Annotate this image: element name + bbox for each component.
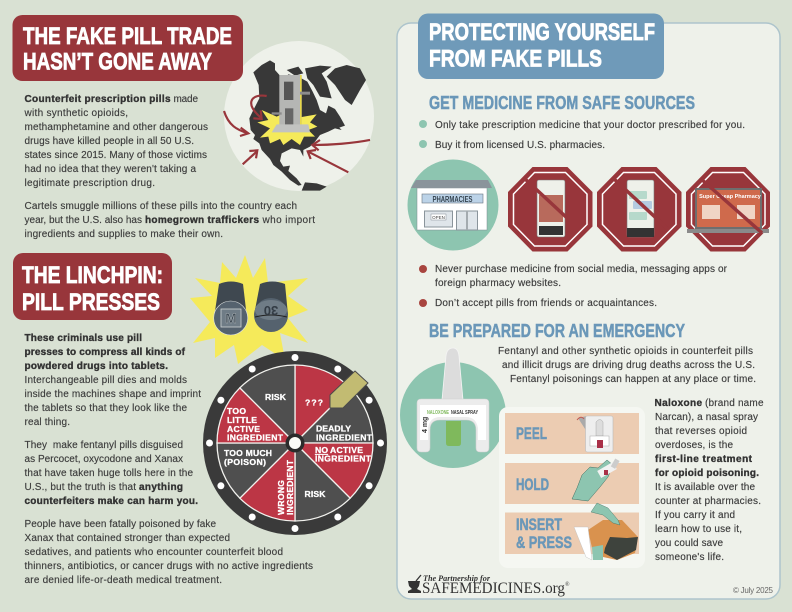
text: they make fentanyl pills: as Percocet, oxycodone and Xanax [24,454,183,465]
chart: risk wheel: INGREDIENT [285,459,295,515]
text: these criminals: These criminals use pill [24,333,142,344]
chart: risk wheel: RISK [265,392,287,402]
chart: risk wheel: INGREDIENT [315,454,372,464]
heading: the linchpin: PILL PRESSES [22,289,160,316]
icon: naloxone nasal spray: 4 mg [422,417,429,433]
chart: risk wheel: INGREDIENT [227,432,284,442]
list: avoid [419,264,728,309]
text: these criminals: presses to compress all kinds of [24,347,186,358]
text: naloxone: Narcan), a nasal spray [655,412,758,423]
text: naloxone: Naloxone [654,398,702,409]
text: these criminals: the tablets so that they look like the [24,403,187,414]
text: naloxone: for opioid poisoning. [655,468,759,479]
icon: pharmacy: OPEN [432,215,445,220]
text: they make fentanyl pills: that have taken huge tolls here in the [24,468,193,479]
text: naloxone: someone's life. [655,552,724,563]
icon: punch 30 [254,282,288,332]
chart: risk wheel: ACTIVE [227,424,260,434]
text: naloxone: (brand name [705,398,764,409]
text: these criminals: inside the machines shape and imprint [24,389,201,400]
text: these criminals: real thing. [24,417,70,428]
text: cartels and homegrown traffickers [24,201,315,240]
text: people have been fatally poisoned: People have been fatally poisoned by fake [24,519,216,530]
text: counterfeit prescription pills: methamphetamine and other dangerous [24,122,208,133]
text: fentanyl [498,346,756,385]
text: people have been fatally poisoned: sedatives, and patients who encounter counterfeit blood [24,547,283,558]
icon: naloxone nasal spray [400,348,506,468]
icon: no foreign websites [686,167,770,252]
text: cartels and homegrown traffickers: homegrown traffickers [145,215,259,226]
text: naloxone: If you carry it and [655,510,735,521]
subheading: be prepared: BE PREPARED FOR AN EMERGENCY [429,321,685,341]
icon: no messaging apps [597,167,682,252]
chart: risk wheel [203,351,387,535]
text: counterfeit prescription pills: legitimate prescription drug. [24,178,155,189]
icon: no foreign websites: Super Cheap Pharmacy [699,194,762,200]
heading: the linchpin: THE LINCHPIN: [22,262,163,289]
list: safe sources: Buy it from licensed U.S. pharmacies. [435,140,605,151]
text: naloxone: overdoses, is the [655,440,733,451]
icon: peel package [577,416,613,452]
text: fentanyl: Fentanyl poisonings can happen at any place or time. [510,374,756,385]
icon: punch M: M [225,310,237,326]
icon: wheel pointer [330,371,368,408]
text: counterfeit prescription pills: drugs have killed people in all 50 U.S. [24,136,194,147]
logo: partnership for safe medicines: The Partnership for [423,574,491,583]
heading: the fake pill trade: HASN’T GONE AWAY [23,48,212,76]
text: counterfeit prescription pills [24,94,208,189]
text: naloxone: first-line treatment [655,454,753,465]
icon: pharmacy [408,160,498,250]
text: naloxone: you could save [655,538,723,549]
text: cartels and homegrown traffickers: who import [262,215,315,226]
text: cartels and homegrown traffickers: ingredients and supplies to make their own. [24,229,223,240]
list: avoid: Never purchase medicine from social media, messaging apps or [435,264,728,275]
chart: risk wheel: RISK [304,489,326,499]
icon: person receiving nasal spray [574,503,638,560]
text: they make fentanyl pills: counterfeiters make can harm you. [24,496,198,507]
text: naloxone: that reverses opioid [655,426,747,437]
icon: pill press machine [272,75,310,132]
text: counterfeit prescription pills: states since 2015. Many of those victims [24,150,207,161]
text: people have been fatally poisoned: are denied life-or-death medical treatment. [24,575,222,586]
heading: protecting yourself: FROM FAKE PILLS [429,46,602,72]
panel: naloxone steps: HOLD [516,476,549,494]
text: they make fentanyl pills: U.S., but the truth is that [24,482,136,493]
panel: naloxone steps: PEEL [516,425,547,443]
panel: naloxone steps: INSERT [516,516,562,534]
panel: naloxone steps: & PRESS [516,534,572,552]
list: avoid: Don’t accept pills from friends or acquaintances. [435,298,657,309]
text: cartels and homegrown traffickers: Cartels smuggle millions of these pills into the country each [24,201,297,212]
panel: protecting yourself [397,23,780,599]
text: these criminals: Interchangeable pill dies and molds [24,375,187,386]
text: naloxone: learn how to use it, [655,524,742,535]
heading: the linchpin [13,253,172,320]
chart: risk wheel: TOO [227,406,246,416]
list: safe sources: Only take prescription medicine that your doctor prescribed for you. [435,120,745,131]
text: naloxone: counter at pharmacies. [655,496,761,507]
icon: hand holding spray [572,459,620,501]
copyright: © July 2025 [733,586,774,595]
text: counterfeit prescription pills: made [174,94,198,105]
heading: protecting yourself [418,14,664,79]
chart: risk wheel: WRONG [276,480,286,515]
chart: risk wheel: LITTLE [227,415,257,425]
text: people have been fatally poisoned [24,519,313,586]
text: counterfeit prescription pills: Counterfeit prescription pills [24,94,171,105]
text: counterfeit prescription pills: with synthetic opioids, [24,108,128,119]
text: cartels and homegrown traffickers: year, but the U.S. also has [24,215,142,226]
logo: partnership for safe medicines: SAFEMEDICINES.org [422,580,565,597]
icon: punch M [214,282,248,335]
text: these criminals [24,333,201,428]
text: fentanyl: and illicit drugs are driving drug deaths across the U.S. [502,360,755,371]
heading: the fake pill trade [12,15,243,81]
chart: risk wheel: ??? [305,398,323,408]
icon: starburst behind press punches [190,255,308,364]
text: counterfeit prescription pills: had no idea that they weren't taking a [24,164,196,175]
icon: pharmacy: PHARMACIES [432,195,473,204]
chart: risk wheel: NO [315,445,328,455]
chart: risk wheel: (POISON) [224,457,266,467]
text: they make fentanyl pills: anything [139,482,183,493]
map: pills smuggled into North America [224,41,374,191]
chart: risk wheel: TOO MUCH [224,448,272,458]
text: naloxone [654,398,764,563]
chart: risk wheel: ACTIVE [330,445,363,455]
icon: naloxone nasal spray: NASAL SPRAY [451,410,478,416]
text: people have been fatally poisoned: Xanax that contained stronger than expected [24,533,230,544]
icon: naloxone nasal spray: NALOXONE [427,410,449,416]
chart: risk wheel: INGREDIENT [316,432,373,442]
heading: the fake pill trade: THE FAKE PILL TRADE [23,23,232,50]
text: they make fentanyl pills [24,440,198,507]
subheading: get medicine: GET MEDICINE FROM SAFE SOURCES [429,93,695,113]
chart: risk wheel: DEADLY [316,424,351,434]
list: avoid: foreign pharmacy websites. [435,278,561,289]
text: fentanyl: Fentanyl and other synthetic opioids in counterfeit pills [498,346,753,357]
logo: partnership for safe medicines: ® [565,581,570,588]
text: people have been fatally poisoned: thinners, antibiotics, or cancer drugs with no active ingredients [24,561,313,572]
list: safe sources [419,120,745,151]
text: these criminals: powdered drugs into tablets. [24,361,168,372]
icon: no social media [508,167,592,252]
logo: partnership for safe medicines [408,574,570,597]
text: naloxone: It is available over the [655,482,755,493]
arrows into the country [224,96,370,172]
starburst [257,110,317,145]
heading: protecting yourself: PROTECTING YOURSELF [429,19,655,46]
icon: punch 30: 30 [264,303,278,318]
text: they make fentanyl pills: They make fentanyl pills disguised [24,440,183,451]
panel: naloxone steps [499,407,645,568]
